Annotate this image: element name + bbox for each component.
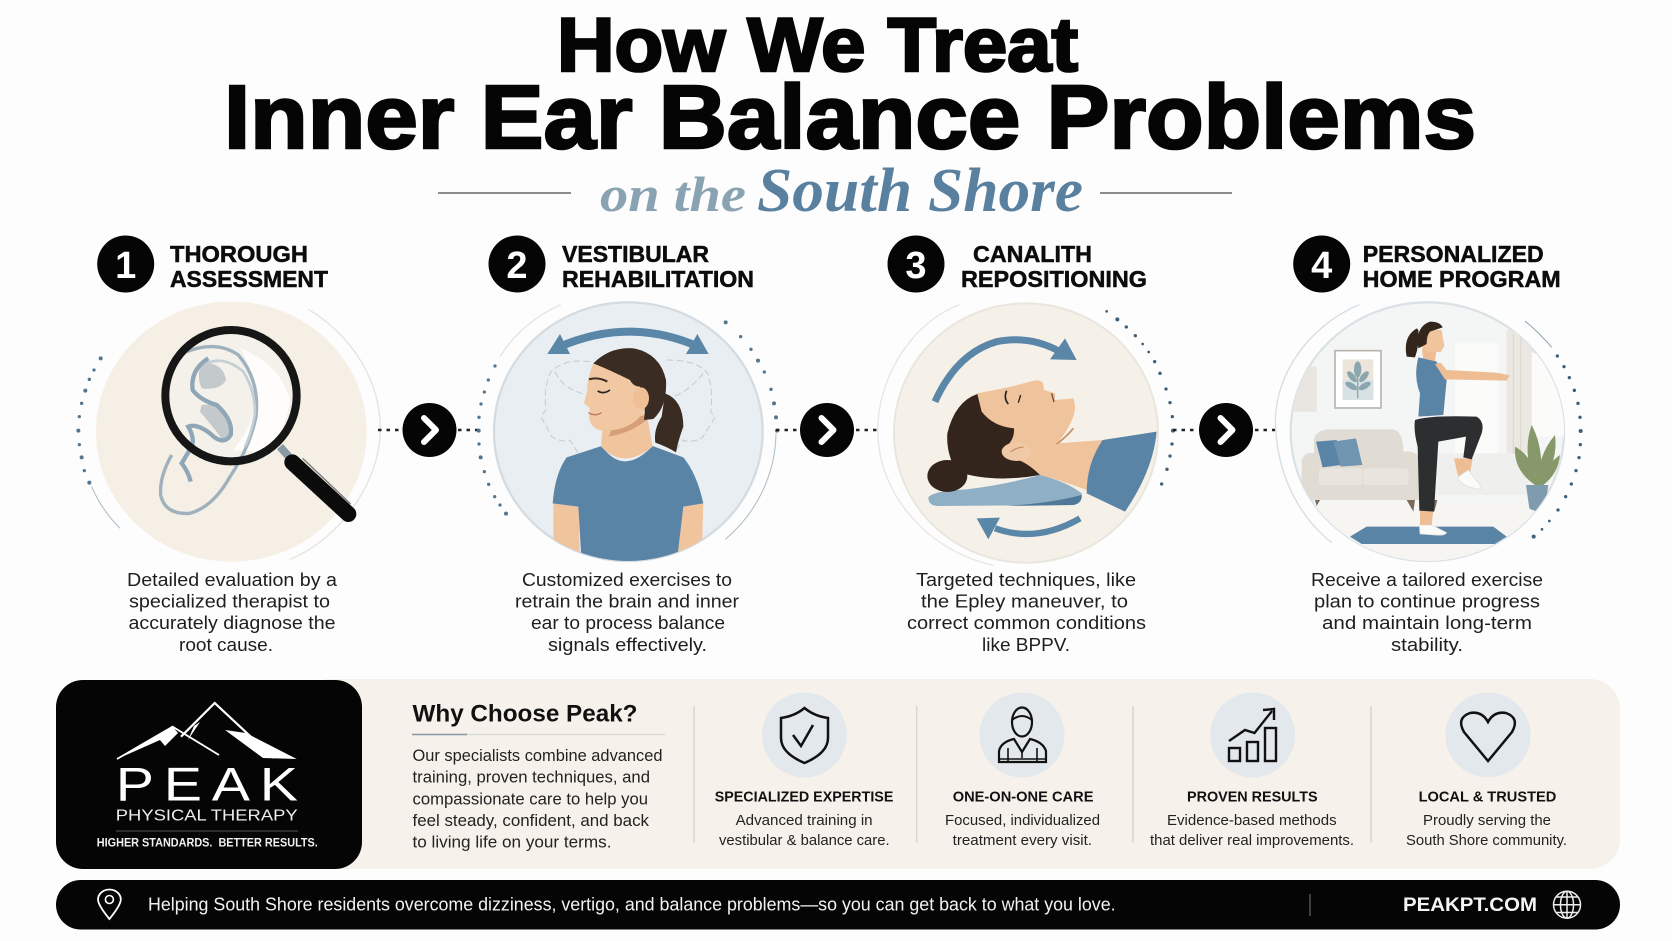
icon: clinician	[980, 692, 1064, 778]
icon: location pin	[98, 890, 121, 919]
arrow: step 1 to step 2	[378, 403, 482, 457]
arrow: step 2 to step 3	[776, 403, 880, 457]
step 2 heading: VESTIBULAR	[562, 241, 709, 267]
feature: local and trusted: LOCAL & TRUSTED	[1419, 789, 1556, 806]
step 4 description: and maintain long-term	[1322, 613, 1532, 633]
feature: local and trusted	[1406, 692, 1567, 849]
step 1 heading	[170, 241, 328, 292]
step 4 heading	[1363, 241, 1561, 292]
step 1 description: Detailed evaluation by a	[127, 570, 338, 590]
step 1 heading: THOROUGH	[170, 241, 308, 267]
icon: rising bar chart	[1210, 692, 1295, 778]
step 2 description: ear to process balance	[531, 613, 725, 633]
feature: specialized expertise: vestibular & balance care.	[719, 833, 890, 849]
heading: why choose peak: Why Choose Peak?	[412, 700, 638, 728]
step 1 heading: ASSESSMENT	[170, 266, 328, 292]
step 4 heading: PERSONALIZED	[1363, 241, 1544, 267]
step 1 number badge: 1	[115, 245, 136, 287]
illustration: woman balancing at home	[1275, 302, 1583, 570]
step 4 description: Receive a tailored exercise	[1311, 570, 1543, 590]
feature: proven results: that deliver real improvements.	[1150, 833, 1354, 849]
title: Inner Ear Balance Problems	[224, 68, 1476, 168]
feature: specialized expertise	[715, 692, 893, 849]
arrow: step 3 to step 4	[1173, 403, 1277, 457]
step 3 number badge	[888, 236, 944, 292]
illustration: patient lying on pillow	[878, 303, 1175, 565]
panel: step 2 vestibular rehabilitation	[477, 236, 779, 655]
feature: specialized expertise: Advanced training in	[736, 813, 873, 829]
why choose peak paragraph: compassionate care to help you	[412, 790, 648, 808]
icon: heart	[1446, 692, 1530, 778]
logo panel: peak physical therapy	[56, 680, 362, 869]
step 4 description: plan to continue progress	[1314, 592, 1540, 612]
feature: proven results: Evidence-based methods	[1167, 813, 1337, 829]
step 4 description	[1311, 570, 1543, 655]
step 3 heading: CANALITH	[973, 241, 1092, 267]
illustration: woman turning head	[477, 302, 779, 563]
subtitle: on the	[600, 166, 746, 222]
panel: why choose peak	[300, 679, 1620, 869]
step 2 heading: REHABILITATION	[562, 266, 754, 292]
logo panel: peak physical therapy: PEAK	[116, 759, 308, 811]
why choose peak paragraph: Our specialists combine advanced	[412, 747, 662, 765]
step 1 description: root cause.	[179, 635, 273, 655]
step 1 description	[127, 570, 338, 655]
step 2 number badge: 2	[506, 245, 528, 287]
subtitle	[438, 157, 1232, 225]
panel: step 4 personalized home program	[1275, 236, 1583, 655]
feature: one-on-one care: treatment every visit.	[953, 833, 1092, 849]
footer bar: Helping South Shore residents overcome dizziness, vertigo, and balance problems—so you can get back to what you love.	[148, 895, 1116, 915]
icon: shield with check	[762, 692, 847, 778]
why choose peak paragraph: feel steady, confident, and back	[412, 812, 650, 830]
step 1 description: accurately diagnose the	[128, 613, 336, 633]
step 2 description: retrain the brain and inner	[515, 592, 739, 612]
step 3 number badge: 3	[905, 245, 927, 287]
icon: globe	[1554, 891, 1580, 918]
feature: local and trusted: Proudly serving the	[1423, 813, 1551, 829]
step 3 heading: REPOSITIONING	[961, 266, 1147, 292]
feature: one-on-one care	[945, 692, 1100, 849]
step 2 description: signals effectively.	[548, 635, 707, 655]
step 3 heading	[961, 241, 1147, 292]
step 1 number badge	[97, 236, 154, 292]
step 3 description: correct common conditions	[907, 613, 1146, 633]
icon: ear under magnifying glass	[76, 302, 380, 562]
step 3 description: like BPPV.	[982, 635, 1070, 655]
step 2 heading	[562, 241, 754, 292]
step 4 heading: HOME PROGRAM	[1363, 266, 1561, 292]
feature: proven results: PROVEN RESULTS	[1187, 789, 1318, 806]
footer bar: PEAKPT.COM	[1403, 894, 1537, 916]
logo panel: peak physical therapy: PHYSICAL THERAPY	[116, 808, 298, 825]
why choose peak paragraph: to living life on your terms.	[412, 834, 612, 852]
subtitle: South Shore	[757, 157, 1083, 225]
title	[224, 3, 1476, 168]
title: How We Treat	[557, 3, 1078, 88]
step 4 number badge	[1293, 236, 1350, 292]
step 3 description: the Epley maneuver, to	[921, 592, 1128, 612]
step 2 number badge	[488, 236, 546, 292]
step 4 description: stability.	[1391, 635, 1463, 655]
step 4 number badge: 4	[1311, 245, 1332, 287]
why choose peak paragraph: training, proven techniques, and	[412, 769, 650, 787]
panel: step 1 thorough assessment	[76, 236, 380, 655]
step 3 description	[907, 570, 1146, 655]
feature: specialized expertise: SPECIALIZED EXPERTISE	[715, 789, 893, 806]
step 3 description: Targeted techniques, like	[916, 570, 1136, 590]
step 2 description: Customized exercises to	[522, 570, 732, 590]
step 1 description: specialized therapist to	[129, 592, 330, 612]
footer bar	[56, 880, 1620, 930]
panel: step 3 canalith repositioning	[878, 236, 1175, 655]
feature: local and trusted: South Shore community.	[1406, 833, 1567, 849]
step 2 description	[515, 570, 739, 655]
feature: one-on-one care: Focused, individualized	[945, 813, 1100, 829]
feature: proven results	[1150, 692, 1354, 849]
icon: mountain logo	[117, 703, 297, 759]
logo panel: peak physical therapy: HIGHER STANDARDS. BETTER RESULTS.	[97, 838, 318, 850]
why choose peak paragraph	[412, 747, 662, 852]
feature: one-on-one care: ONE-ON-ONE CARE	[953, 789, 1094, 806]
